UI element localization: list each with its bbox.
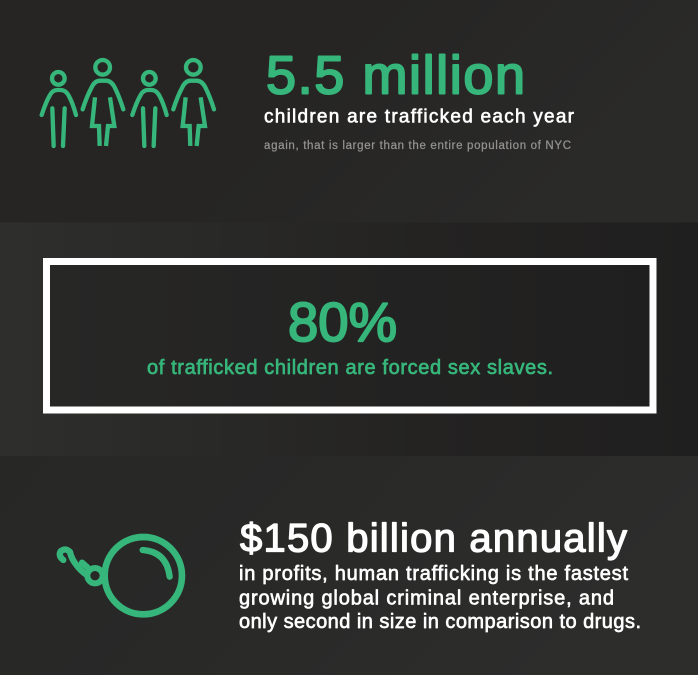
text: NYC comparison: again, that is larger than the entire population of NYC xyxy=(264,140,571,152)
text: profits description: in profits, human trafficking is the fastest xyxy=(239,563,628,585)
panel: white framed callout xyxy=(46,262,653,410)
heading: $150 billion annually: $150 billion annually xyxy=(240,516,627,560)
heading: 80%: 80% xyxy=(288,291,397,353)
text: children are trafficked each year: children are trafficked each year xyxy=(264,106,575,128)
text: profits description xyxy=(239,563,641,633)
panel: top statistic background xyxy=(0,0,698,222)
text: profits description: growing global criminal enterprise, and xyxy=(239,588,614,610)
heading: 5.5 million: 5.5 million xyxy=(266,46,525,106)
panel: bottom statistic background xyxy=(0,456,698,675)
text: forced sex slaves: of trafficked children are forced sex slaves. xyxy=(147,357,553,379)
panel: middle band background xyxy=(0,222,698,456)
icon: four child figures xyxy=(42,60,214,146)
text: profits description: only second in size in comparison to drugs. xyxy=(239,611,641,633)
icon: ball and chain xyxy=(60,537,182,614)
